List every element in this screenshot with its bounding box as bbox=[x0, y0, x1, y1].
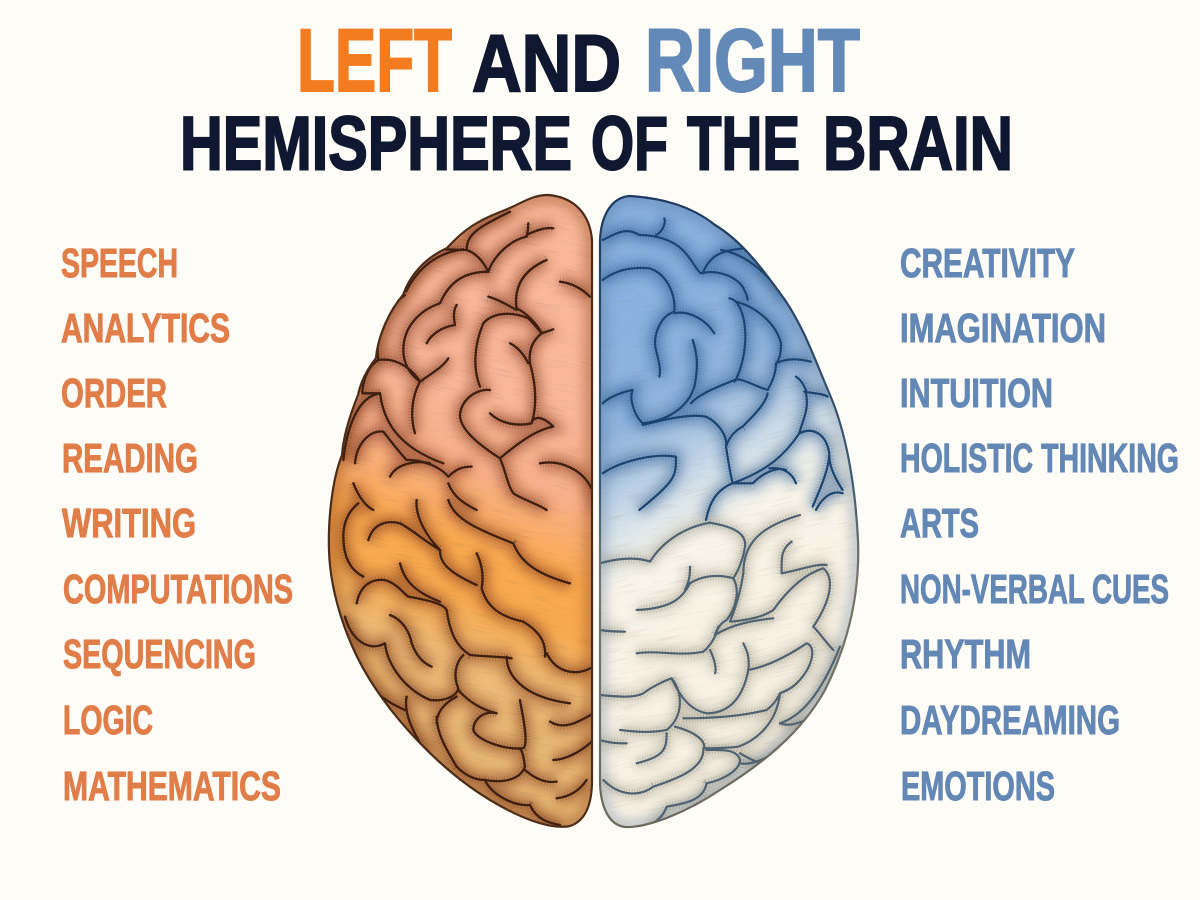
left hemisphere bbox=[328, 194, 594, 828]
left function list: LOGIC bbox=[63, 697, 153, 743]
title: HEMISPHERE bbox=[180, 102, 572, 186]
left function list: ORDER bbox=[61, 370, 167, 416]
title: THE bbox=[687, 102, 800, 186]
left function list: ANALYTICS bbox=[61, 305, 230, 351]
right function list bbox=[900, 240, 1179, 809]
left function list: COMPUTATIONS bbox=[63, 566, 293, 612]
right function list: IMAGINATION bbox=[900, 305, 1106, 351]
right function list: DAYDREAMING bbox=[900, 697, 1120, 743]
title bbox=[180, 10, 1013, 186]
title: LEFT bbox=[297, 10, 452, 110]
right function list: ARTS bbox=[900, 500, 979, 546]
right function list: CREATIVITY bbox=[900, 240, 1075, 286]
right function list: RHYTHM bbox=[900, 631, 1031, 677]
right hemisphere bbox=[598, 194, 860, 828]
title: BRAIN bbox=[823, 102, 1013, 186]
left function list bbox=[61, 240, 293, 809]
left function list: SPEECH bbox=[61, 240, 178, 286]
title: RIGHT bbox=[645, 10, 860, 110]
left function list: WRITING bbox=[62, 500, 196, 546]
right function list: INTUITION bbox=[900, 370, 1053, 416]
title: AND bbox=[472, 19, 621, 109]
right function list: EMOTIONS bbox=[901, 763, 1055, 809]
left function list: READING bbox=[62, 435, 198, 481]
brain illustration bbox=[328, 194, 860, 828]
left function list: MATHEMATICS bbox=[63, 763, 281, 809]
title: OF bbox=[591, 102, 668, 186]
left function list: SEQUENCING bbox=[63, 631, 256, 677]
